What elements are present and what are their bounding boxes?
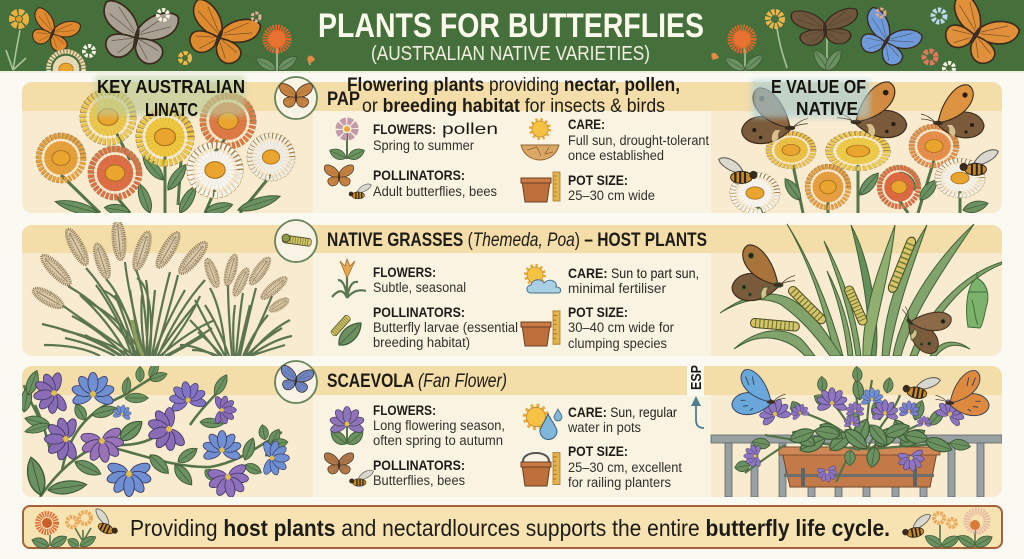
overlay heading fragment: value of native: NATIVE <box>796 99 858 119</box>
illustration: caterpillars on grass blades with chrysalis <box>720 224 1002 359</box>
text: flowers: FLOWERS: <box>373 121 436 137</box>
text: flowers: often spring to autumn <box>373 433 503 448</box>
text: pollinators <box>373 304 518 350</box>
illustration: native grass clumps <box>30 220 292 356</box>
header illustrations: right <box>711 0 1021 74</box>
text: pollen: pollen <box>442 121 498 138</box>
overlay heading fragment: key australian <box>95 76 245 120</box>
text: care <box>567 404 677 435</box>
text: care: CARE: Sun to part sun, <box>568 265 699 281</box>
icon: sun and soil <box>521 121 559 160</box>
text: pollinators: POLLINATORS: <box>373 457 465 473</box>
text: care: CARE: <box>568 116 605 132</box>
text: care: water in pots <box>567 420 641 435</box>
icon: flower <box>328 121 366 162</box>
icon: pot and ruler <box>521 311 560 346</box>
icon: sun and cloud <box>527 267 561 293</box>
icon: butterfly and bee <box>324 453 374 486</box>
text: pot size <box>568 172 655 203</box>
overlay heading fragment: value of native: E VALUE OF <box>771 77 866 97</box>
text: flowers: Long flowering season, <box>373 418 505 433</box>
text: care: minimal fertiliser <box>568 281 667 296</box>
panel: paper daisies <box>22 75 1002 218</box>
panel: scaevola <box>19 360 1002 501</box>
illustration: butterflies on flowers <box>719 82 998 215</box>
text: care: Full sun, drought-tolerant <box>568 133 709 148</box>
badge: caterpillar <box>275 220 317 262</box>
text: flowers: Spring to summer <box>373 138 474 153</box>
overlay text: flowering plants: or breeding habitat for insects & birds <box>362 96 665 117</box>
footer icons: right <box>900 511 994 550</box>
text: care <box>568 116 709 163</box>
illustration: railing planter <box>711 366 1002 497</box>
text: flowers: FLOWERS: <box>373 402 436 418</box>
text: care <box>568 265 699 296</box>
illustration: fan flower sprays <box>19 360 289 501</box>
text: flowers: Subtle, seasonal <box>373 280 466 295</box>
text: pollinators: POLLINATORS: <box>373 304 465 320</box>
icon: butterfly and bee <box>324 165 371 199</box>
overlay text: flowering plants: Flowering plants providing nectar, pollen, <box>347 75 680 96</box>
icon: railing pot and ruler <box>521 453 560 486</box>
heading: scaevola: SCAEVOLA (Fan Flower) <box>327 371 507 392</box>
arrow: teal upward <box>691 396 704 428</box>
icon: grass flower <box>332 259 366 298</box>
text: pot size: 25–30 cm, excellent <box>568 460 682 475</box>
text: flowers <box>373 264 466 295</box>
overlay heading fragment: key australian: LINATC <box>145 100 198 120</box>
icon: pot and ruler <box>521 172 560 202</box>
text: pot size: POT SIZE: <box>568 172 628 188</box>
text: pot size: 30–40 cm wide for <box>568 320 674 335</box>
text: pollinators: breeding habitat) <box>373 335 470 350</box>
text: pollinators: Butterflies, bees <box>373 473 465 488</box>
footer icons: left <box>30 508 123 550</box>
text: pollinators <box>373 167 497 199</box>
heading: native grasses: NATIVE GRASSES (Themeda, Poa) – HOST PLANTS <box>327 230 707 251</box>
subtitle: (AUSTRALIAN NATIVE VARIETIES) <box>371 43 650 65</box>
planter foliage <box>734 366 971 484</box>
text: pollinators: Adult butterflies, bees <box>373 184 497 199</box>
text: flowers <box>373 121 474 153</box>
icon: sun and water drops <box>526 407 562 440</box>
header illustrations: left <box>5 0 315 71</box>
overlay heading fragment: value of native <box>752 77 870 119</box>
footer banner <box>23 506 1002 550</box>
header banner <box>0 0 1024 73</box>
text: pot size <box>568 304 674 351</box>
text: pot size: clumping species <box>568 336 667 351</box>
text: pot size <box>568 443 682 490</box>
text: flowers: FLOWERS: <box>373 264 436 280</box>
text: pot size: for railing planters <box>568 475 671 490</box>
panel: native grasses <box>22 220 1002 359</box>
text: pot size: POT SIZE: <box>568 304 628 320</box>
vertical text fragment: ESP: ESP <box>688 365 705 390</box>
text: pot size: POT SIZE: <box>568 443 628 459</box>
title: PLANTS FOR BUTTERFLIES <box>318 7 704 45</box>
badge: blue butterfly <box>275 361 317 403</box>
icon: purple flower <box>328 407 366 448</box>
planter box <box>779 447 940 487</box>
text: care: CARE: Sun, regular <box>568 404 677 420</box>
heading fragment: PAP: PAP <box>327 89 360 110</box>
icon: caterpillar and leaf <box>334 318 366 350</box>
illustration: paper daisies <box>39 92 292 218</box>
text: care: once established <box>568 148 664 163</box>
text: pollinators: POLLINATORS: <box>373 167 465 183</box>
overlay heading fragment: key australian: KEY AUSTRALIAN <box>97 77 245 97</box>
footer message: Providing host plants and nectardlources supports the entire butterfly life cycle. <box>130 515 890 541</box>
text: flowers <box>373 402 505 448</box>
overlay text: flowering plants <box>347 75 680 117</box>
text: pot size: 25–30 cm wide <box>568 188 655 203</box>
text: pollinators: Butterfly larvae (essential <box>373 320 518 335</box>
railing <box>711 435 1002 497</box>
text: pollinators <box>373 457 465 488</box>
badge: butterfly <box>275 77 317 119</box>
